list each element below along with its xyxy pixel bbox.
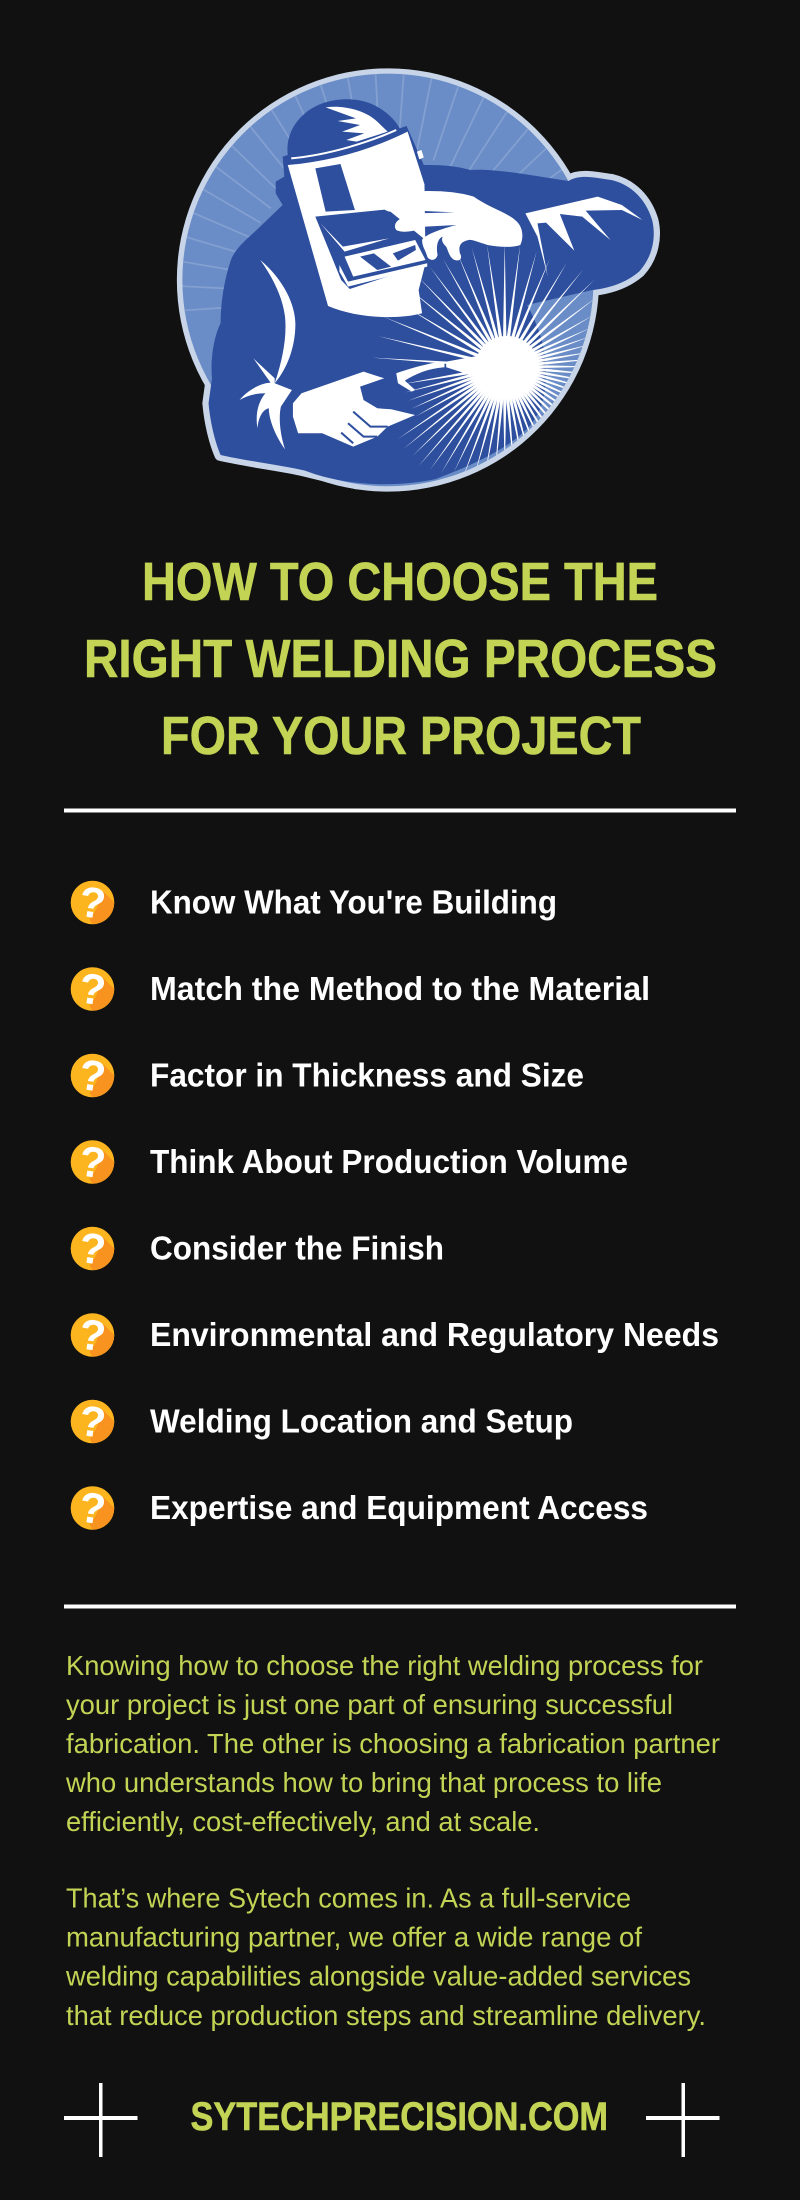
paragraph: about Sytech: manufacturing partner, we offer a wide range of: [66, 1922, 642, 1952]
item 3: Factor in Thickness and Size: [150, 1056, 584, 1094]
paragraph: about Sytech: [65, 1882, 706, 2031]
item 3: [71, 1051, 584, 1102]
mask lower window: [315, 209, 428, 289]
badge outline: arm and lower body: [209, 177, 654, 483]
icon: question mark: ?: [76, 878, 109, 929]
paragraph: fabrication partner: Knowing how to choose the right welding process for: [66, 1650, 703, 1681]
item 1: [71, 878, 557, 929]
icon: question mark: ?: [76, 964, 109, 1016]
item 8: [71, 1483, 648, 1535]
icon: right cross: [646, 2083, 720, 2157]
divider bottom: [64, 1604, 736, 1608]
icon: question mark: ?: [76, 1310, 109, 1362]
website url: SYTECHPRECISION.COM: [190, 2095, 608, 2139]
welding torch: [396, 362, 444, 392]
footer: [64, 2083, 720, 2157]
title: HOW TO CHOOSE THE: [142, 552, 658, 612]
icon: question mark: ?: [76, 1224, 109, 1275]
paragraph: fabrication partner: efficiently, cost-effectively, and at scale.: [66, 1806, 540, 1837]
paragraph: about Sytech: That’s where Sytech comes in. As a full-service: [66, 1882, 631, 1914]
paragraph: fabrication partner: [65, 1650, 720, 1837]
item 8: Expertise and Equipment Access: [150, 1489, 648, 1526]
icon: question mark: ?: [76, 1051, 109, 1102]
icon: question mark: ?: [76, 1397, 109, 1448]
item 6: [71, 1310, 719, 1362]
lower gloved hand: [293, 372, 415, 447]
badge disc: [182, 74, 594, 486]
paragraph: about Sytech: welding capabilities alongside value-added services: [65, 1960, 691, 1992]
glove finger lines: [341, 412, 388, 443]
helmet band: [291, 130, 396, 158]
icon: left cross: [64, 2083, 138, 2157]
item 5: Consider the Finish: [150, 1230, 444, 1266]
item 4: [71, 1137, 628, 1189]
weld sparks: [372, 243, 598, 483]
helmet strap clip: [417, 150, 424, 159]
badge ring: [177, 68, 599, 492]
upper gloved hand: [384, 191, 522, 260]
title: [84, 552, 717, 766]
helmet feather highlight: [326, 107, 388, 142]
icon: question mark: ?: [76, 1137, 109, 1189]
item 7: [71, 1397, 573, 1448]
item 4: Think About Production Volume: [150, 1143, 628, 1180]
welding flash: [446, 336, 539, 397]
paragraph: fabrication partner: your project is just one part of ensuring successful: [66, 1689, 673, 1720]
sleeve highlight: [525, 197, 642, 277]
paragraph: about Sytech: that reduce production steps and streamline delivery.: [66, 2000, 706, 2031]
item 2: [71, 964, 650, 1016]
welder body: [209, 99, 654, 484]
divider top: [64, 808, 736, 812]
title: RIGHT WELDING PROCESS: [84, 629, 717, 689]
sleeve sparks lower left: [240, 358, 292, 449]
checklist: [71, 878, 719, 1535]
chest crescent highlight: [260, 260, 295, 383]
paragraph: fabrication partner: fabrication. The other is choosing a fabrication partner: [66, 1728, 720, 1759]
item 6: Environmental and Regulatory Needs: [150, 1316, 719, 1353]
mask upper window: [315, 164, 355, 212]
illustration: welder badge: [140, 57, 654, 492]
item 2: Match the Method to the Material: [150, 970, 650, 1007]
paragraph: fabrication partner: who understands how to bring that process to life: [65, 1767, 662, 1798]
icon: question mark: ?: [76, 1483, 109, 1535]
item 7: Welding Location and Setup: [150, 1402, 573, 1440]
welding mask: [288, 132, 426, 317]
item 1: Know What You're Building: [150, 884, 557, 920]
item 5: [71, 1224, 444, 1275]
background sun rays: [140, 57, 586, 313]
title: FOR YOUR PROJECT: [161, 706, 641, 766]
